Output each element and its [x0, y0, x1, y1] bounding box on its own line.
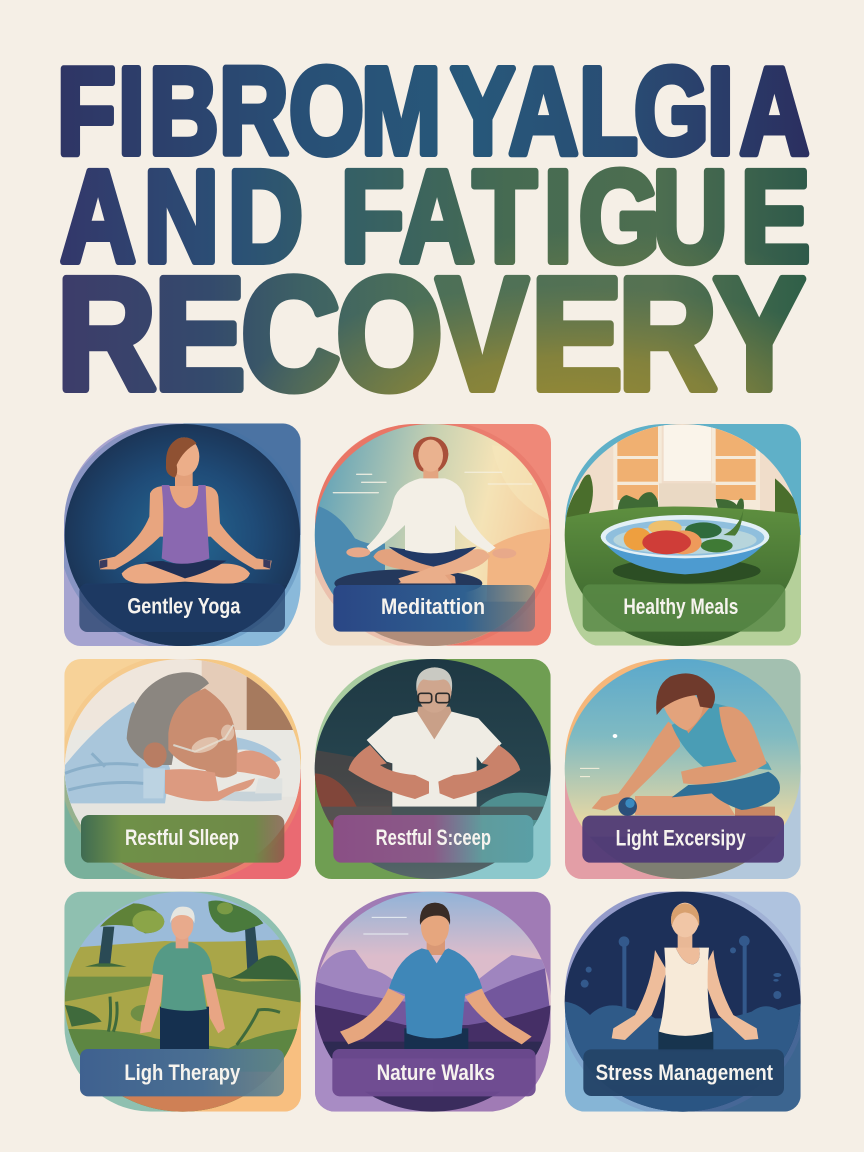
label: Restful Slleep: Restful Slleep — [125, 825, 239, 850]
panel: restful sceep — [314, 659, 551, 879]
label: Light Excersipy: Light Excersipy — [616, 826, 746, 851]
label: Ligh Therapy — [80, 1049, 284, 1096]
panel: stress management — [564, 892, 801, 1112]
label: Stress Management — [583, 1049, 784, 1096]
illustration: older man resting on a table — [62, 657, 305, 883]
illustration: woman stretching — [562, 657, 805, 883]
panel: light therapy — [64, 892, 301, 1112]
label: Gentley Yoga — [79, 583, 285, 632]
panel: nature walks — [314, 892, 551, 1112]
illustration: plate of food in a garden — [562, 422, 805, 648]
panel: meditation — [314, 424, 551, 646]
title: AND FATIGUE — [60, 144, 810, 290]
label: Meditattion: Meditattion — [381, 594, 485, 619]
illustration: man standing in a park — [62, 892, 305, 1118]
panel: restful sleep — [64, 659, 301, 879]
panel: healthy meals — [564, 424, 801, 646]
label: Gentley Yoga: Gentley Yoga — [127, 593, 241, 618]
illustration: meditating person — [312, 422, 555, 652]
label: Restful S:ceep: Restful S:ceep — [376, 825, 491, 850]
title — [57, 43, 810, 423]
label: Restful S:ceep — [333, 815, 533, 863]
label: Meditattion — [333, 585, 535, 632]
label: Stress Management: Stress Management — [596, 1060, 774, 1085]
label: Healthy Meals — [583, 584, 785, 632]
title: RECOVERY — [57, 244, 805, 423]
illustration: man with open arms and hills — [312, 890, 555, 1115]
label: Light Excersipy — [582, 816, 784, 863]
label: Restful Slleep — [81, 815, 284, 863]
illustration: seated yoga woman — [63, 423, 303, 647]
panel: light exercise — [564, 659, 801, 879]
label: Nature Walks — [332, 1049, 536, 1096]
label: Nature Walks: Nature Walks — [377, 1060, 495, 1085]
illustration: woman with open arms at night — [562, 890, 805, 1118]
title: FIBROMYALGIA — [57, 43, 809, 180]
illustration: man with glasses in white t-shirt — [312, 657, 555, 883]
label: Ligh Therapy: Ligh Therapy — [124, 1060, 241, 1085]
label: Healthy Meals: Healthy Meals — [623, 594, 738, 619]
panel: gentley yoga — [64, 423, 301, 646]
